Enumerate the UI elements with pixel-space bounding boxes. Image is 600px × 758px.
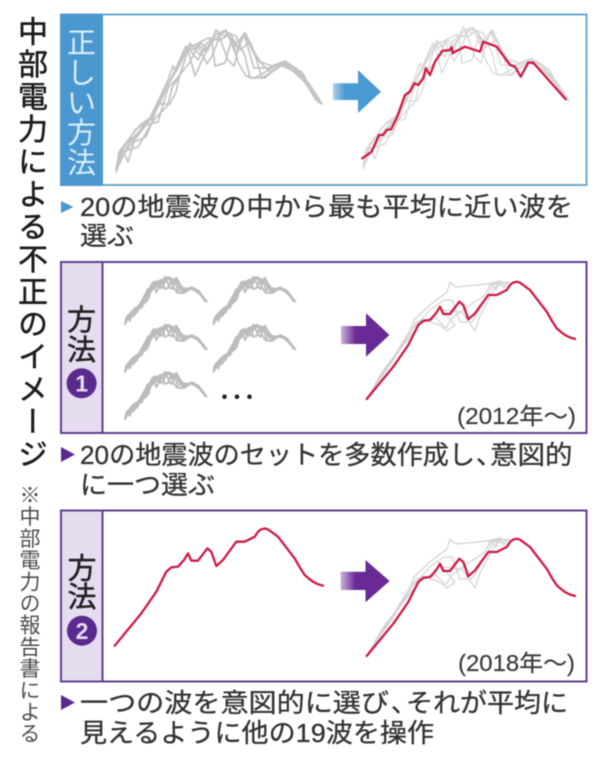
year label: (2018年〜) <box>458 650 575 676</box>
caption: method 2: それが平均に <box>406 688 568 718</box>
sidebar: correct method label: い <box>67 88 96 120</box>
sidebar: method 2 label <box>61 510 102 682</box>
sidebar: method 2 label: 法 <box>67 581 97 614</box>
sidebar: correct method label: 方 <box>67 117 96 150</box>
caption: method 2: 見えるように他の19波を操作 <box>80 718 434 748</box>
sidebar: method 1 label: 法 <box>67 334 96 367</box>
chart: twenty seismic waves <box>116 30 322 172</box>
small waves: many sets <box>125 277 295 419</box>
caption: method 2: 一つの波を意図的に選び <box>80 688 389 718</box>
caption: method 1 <box>61 440 573 500</box>
sidebar: correct method label: 法 <box>67 147 96 180</box>
caption: method 1: 、 <box>476 440 502 470</box>
chart: red wave chosen from the set <box>362 27 569 169</box>
chart: red wave with grey set <box>367 281 575 399</box>
chart: single red wave <box>115 528 323 646</box>
caption: method 2 <box>61 688 568 748</box>
panel: method 1 <box>61 262 586 433</box>
caption: correct method <box>61 192 573 251</box>
caption: method 1: 20の地震波のセットを多数作成し <box>80 440 475 470</box>
caption: method 1: に一つ選ぶ <box>80 470 215 500</box>
sidebar: method 1 label: 1 <box>75 370 88 396</box>
title: vertical heading: 中部電力による不正のイメージ <box>13 16 46 471</box>
arrow: purple <box>341 560 390 602</box>
sidebar: method 1 label <box>61 262 102 433</box>
sidebar: method 2 label: 2 <box>76 618 88 644</box>
sidebar: correct method label <box>60 14 103 186</box>
caption: method 2: 、 <box>391 688 417 718</box>
caption: correct method: 20の地震波の中から最も平均に近い波を <box>80 192 573 222</box>
sidebar: correct method label: し <box>67 58 96 90</box>
panel: correct method <box>60 14 586 186</box>
arrow: purple <box>341 313 390 357</box>
sidebar: correct method label: 正 <box>67 28 96 60</box>
sidebar: method 1 label: 方 <box>67 304 96 337</box>
arrow: blue <box>333 70 381 113</box>
chart: red wave with manipulated grey waves <box>367 538 575 656</box>
source note: vertical: ※中部電力の報告書による <box>17 484 40 744</box>
sidebar: method 2 label: 方 <box>67 552 97 586</box>
caption: method 1: 意図的 <box>490 440 573 470</box>
year label: (2012年〜) <box>457 403 576 429</box>
panel: method 2 <box>61 510 586 682</box>
ellipsis dots <box>222 394 252 399</box>
caption: correct method: 選ぶ <box>80 221 134 251</box>
